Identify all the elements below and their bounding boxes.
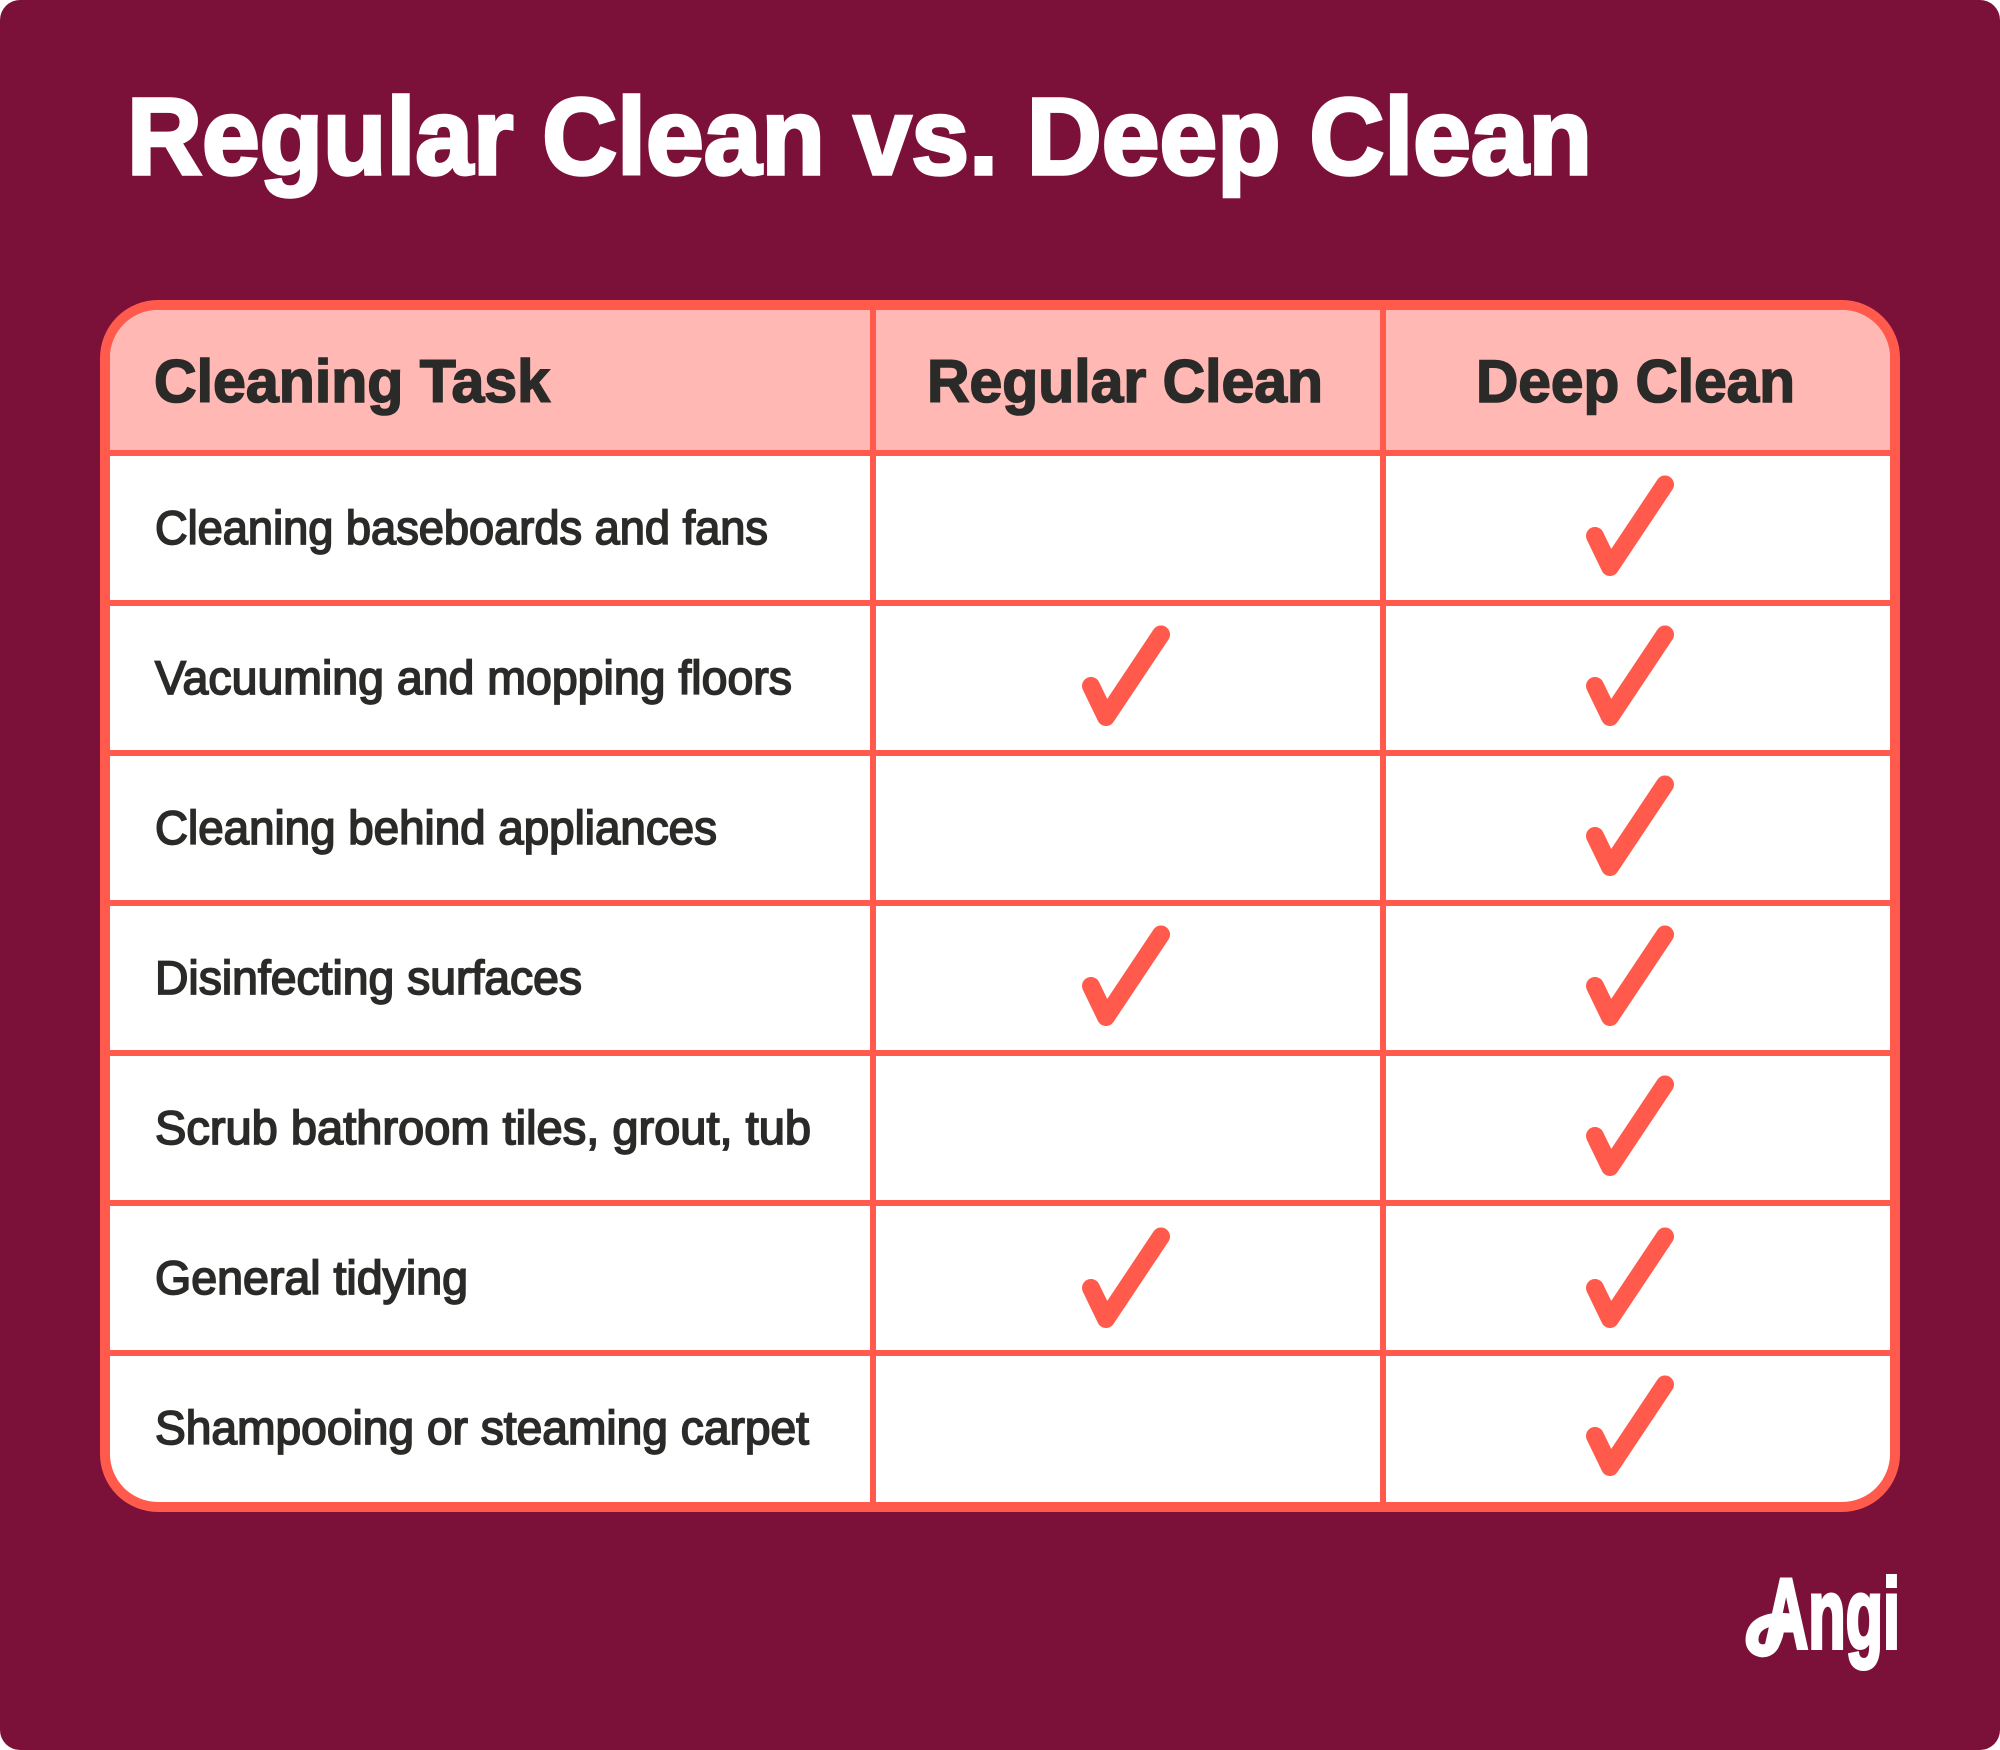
row label: floors: Vacuuming and mopping floors	[155, 651, 792, 704]
icon: check, row 2 deep	[1595, 634, 1665, 717]
row label: bathroom: Scrub bathroom tiles, grout, tub	[155, 1101, 811, 1154]
title: Regular Clean vs. Deep Clean	[127, 76, 1592, 198]
comparison table	[105, 305, 1895, 1507]
icon: check, row 6 regular	[1091, 1236, 1161, 1319]
header row background	[110, 310, 1890, 450]
row label: surfaces: Disinfecting surfaces	[155, 951, 582, 1004]
row label: tidying: General tidying	[155, 1251, 468, 1304]
table frame	[105, 305, 1895, 1507]
row label: baseboards: Cleaning baseboards and fans	[155, 501, 768, 554]
icon: check, row 3 deep	[1595, 784, 1665, 867]
icon: check, row 4 deep	[1595, 934, 1665, 1017]
icon: check, row 1 deep	[1595, 484, 1665, 567]
icon: check, row 5 deep	[1595, 1084, 1665, 1167]
icon: check, row 4 regular	[1091, 934, 1161, 1017]
row label: carpet: Shampooing or steaming carpet	[155, 1401, 809, 1454]
header: cleaning task: Cleaning Task	[154, 348, 551, 415]
logo: Angi: Angi	[1764, 1558, 1900, 1669]
logo: Angi	[1752, 1558, 1900, 1669]
header: regular clean: Regular Clean	[927, 348, 1323, 415]
row label: appliances: Cleaning behind appliances	[155, 801, 717, 854]
icon: check, row 6 deep	[1595, 1236, 1665, 1319]
header: deep clean: Deep Clean	[1476, 348, 1795, 415]
icon: check, row 2 regular	[1091, 634, 1161, 717]
icon: check, row 7 deep	[1595, 1384, 1665, 1467]
